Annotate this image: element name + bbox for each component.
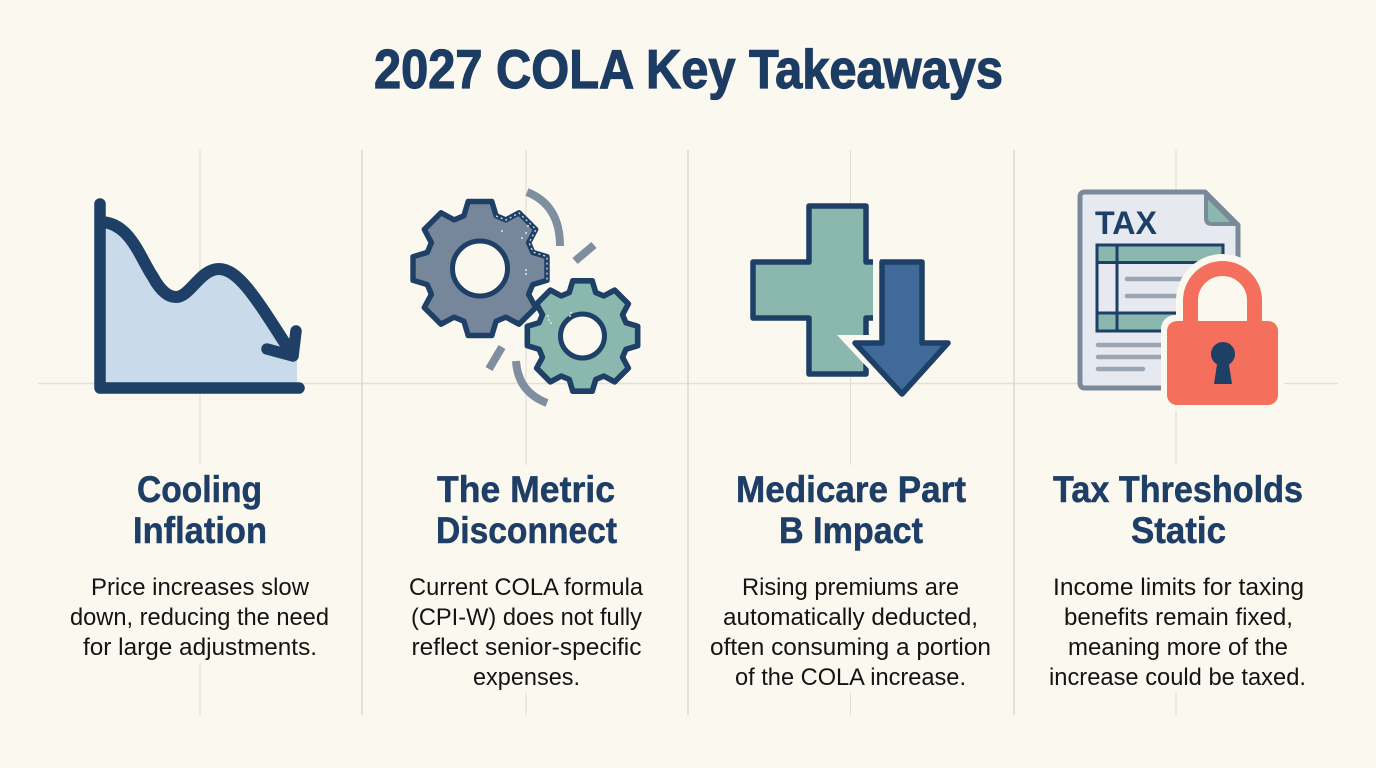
title: 2027 COLA Key Takeaways [374, 38, 1003, 100]
heading: cooling inflation: Cooling [137, 469, 262, 510]
heading: cooling inflation [133, 469, 267, 551]
text: the metric disconnect body [409, 574, 644, 691]
text: cooling inflation body [70, 574, 329, 661]
text: tax thresholds body: meaning more of the [1068, 634, 1288, 661]
heading: the metric disconnect: The Metric [437, 469, 615, 510]
heading: tax thresholds static: Tax Thresholds [1053, 469, 1303, 510]
text: medicare part b body [710, 574, 991, 691]
icon: tax document: TAX [1095, 205, 1158, 241]
heading: medicare part b impact: Medicare Part [736, 469, 966, 510]
icon: small teal gear [527, 281, 638, 391]
icon: tax form with padlock [1080, 192, 1284, 411]
heading: medicare part b impact: B Impact [779, 510, 923, 551]
icon: coral padlock [1161, 268, 1284, 411]
text: tax thresholds body [1049, 574, 1306, 691]
heading: tax thresholds static [1053, 469, 1303, 551]
text: cooling inflation body: down, reducing the need [70, 604, 329, 631]
text: cooling inflation body: for large adjustments. [83, 634, 317, 661]
heading: the metric disconnect [436, 469, 617, 551]
text: the metric disconnect body: Current COLA formula [409, 574, 644, 601]
text: medicare part b body: of the COLA increase. [735, 664, 966, 691]
icon: tax document [1080, 192, 1238, 388]
text: cooling inflation body: Price increases slow [91, 574, 310, 601]
text: tax thresholds body: increase could be taxed. [1049, 664, 1306, 691]
text: medicare part b body: often consuming a portion [710, 634, 991, 661]
icon: down arrow [855, 262, 948, 394]
text: tax thresholds body: Income limits for taxing [1053, 574, 1304, 601]
icon: medical cross [753, 206, 880, 374]
panel: the metric disconnect [409, 192, 644, 691]
icon: large gray gear [413, 202, 547, 335]
text: medicare part b body: automatically deducted, [723, 604, 978, 631]
icon: medical cross with down arrow [753, 206, 948, 394]
text: medicare part b body: Rising premiums are [742, 574, 959, 601]
heading: the metric disconnect: Disconnect [436, 510, 617, 551]
panel: tax thresholds static [1049, 192, 1306, 691]
text: the metric disconnect body: expenses. [473, 664, 580, 691]
text: the metric disconnect body: (CPI-W) does not fully [411, 604, 642, 631]
text: the metric disconnect body: reflect senior-specific [412, 634, 642, 661]
heading: tax thresholds static: Static [1131, 510, 1226, 551]
icon: worn gears [413, 192, 638, 403]
panel: cooling inflation [70, 204, 329, 661]
icon: motion dashes [489, 192, 594, 403]
text: tax thresholds body: benefits remain fixed, [1064, 604, 1293, 631]
panel: medicare part b impact [710, 206, 991, 691]
icon: falling line chart with arrow [100, 204, 299, 388]
heading: medicare part b impact [736, 469, 966, 551]
heading: cooling inflation: Inflation [133, 510, 267, 551]
